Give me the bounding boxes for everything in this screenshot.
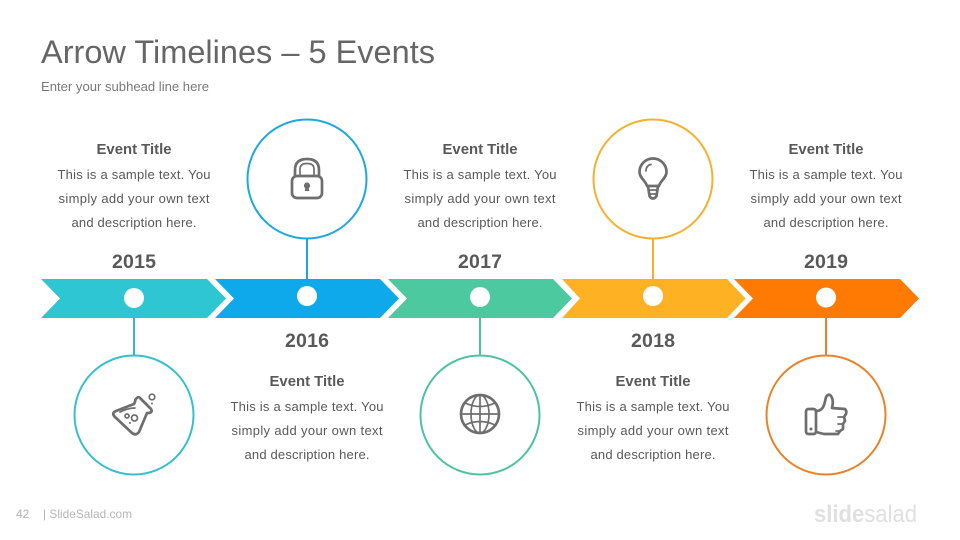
years: 2017 [458,251,502,273]
event text 2017: This is a sample text. You [404,167,556,182]
icon: light bulb [640,158,666,198]
footer page number: 42 [16,507,30,521]
event text 2018: and description here. [590,447,716,462]
event text 2016: simply add your own text [232,423,383,438]
years [112,251,848,352]
circle: padlock [248,120,366,238]
icon: flask [113,394,155,434]
event text 2019: and description here. [764,215,888,230]
subhead: Enter your subhead line here [41,79,209,94]
event text 2015: This is a sample text. You [58,167,210,182]
event text 2015: and description here. [72,215,196,230]
years: 2019 [804,251,848,273]
circle: thumbs up [766,356,886,474]
icon: thumbs up [806,395,846,434]
event text 2016 [230,373,384,462]
arrow timeline [41,279,919,318]
event text 2015: Event Title [96,141,172,158]
years: 2015 [112,251,156,273]
circle: light bulb [594,120,712,238]
event text 2019: Event Title [788,141,864,158]
event text 2017: Event Title [442,141,518,158]
event text 2018: Event Title [616,373,690,390]
arrow 2016 [215,279,399,318]
event text 2017: and description here. [418,215,542,230]
event text 2015 [58,141,210,230]
arrow 2017 [388,279,572,318]
years: 2016 [285,330,329,352]
arrow 2018 [562,279,746,318]
logo wordmark: slidesalad [814,501,917,528]
event text 2019 [750,141,902,230]
circle: globe [420,356,540,474]
event text 2016: Event Title [270,373,344,390]
event text 2019: simply add your own text [750,191,902,206]
event text 2019: This is a sample text. You [750,167,902,182]
connector lines [134,238,826,356]
footer site: | SlideSalad.com [43,507,132,521]
event text 2016: This is a sample text. You [230,399,384,414]
icon: globe [461,395,499,433]
circle: flask [74,356,194,474]
event text 2018 [576,373,730,462]
arrow 2015 [41,279,226,318]
timeline dots [124,286,836,308]
event text 2016: and description here. [244,447,370,462]
event text 2018: This is a sample text. You [576,399,730,414]
event text 2017: simply add your own text [404,191,556,206]
years: 2018 [631,330,675,352]
event text 2017 [404,141,556,230]
event text 2015: simply add your own text [58,191,210,206]
event text 2018: simply add your own text [578,423,729,438]
title: Arrow Timelines – 5 Events [41,34,435,70]
icon: padlock [292,159,322,198]
arrow 2019 [734,279,919,318]
